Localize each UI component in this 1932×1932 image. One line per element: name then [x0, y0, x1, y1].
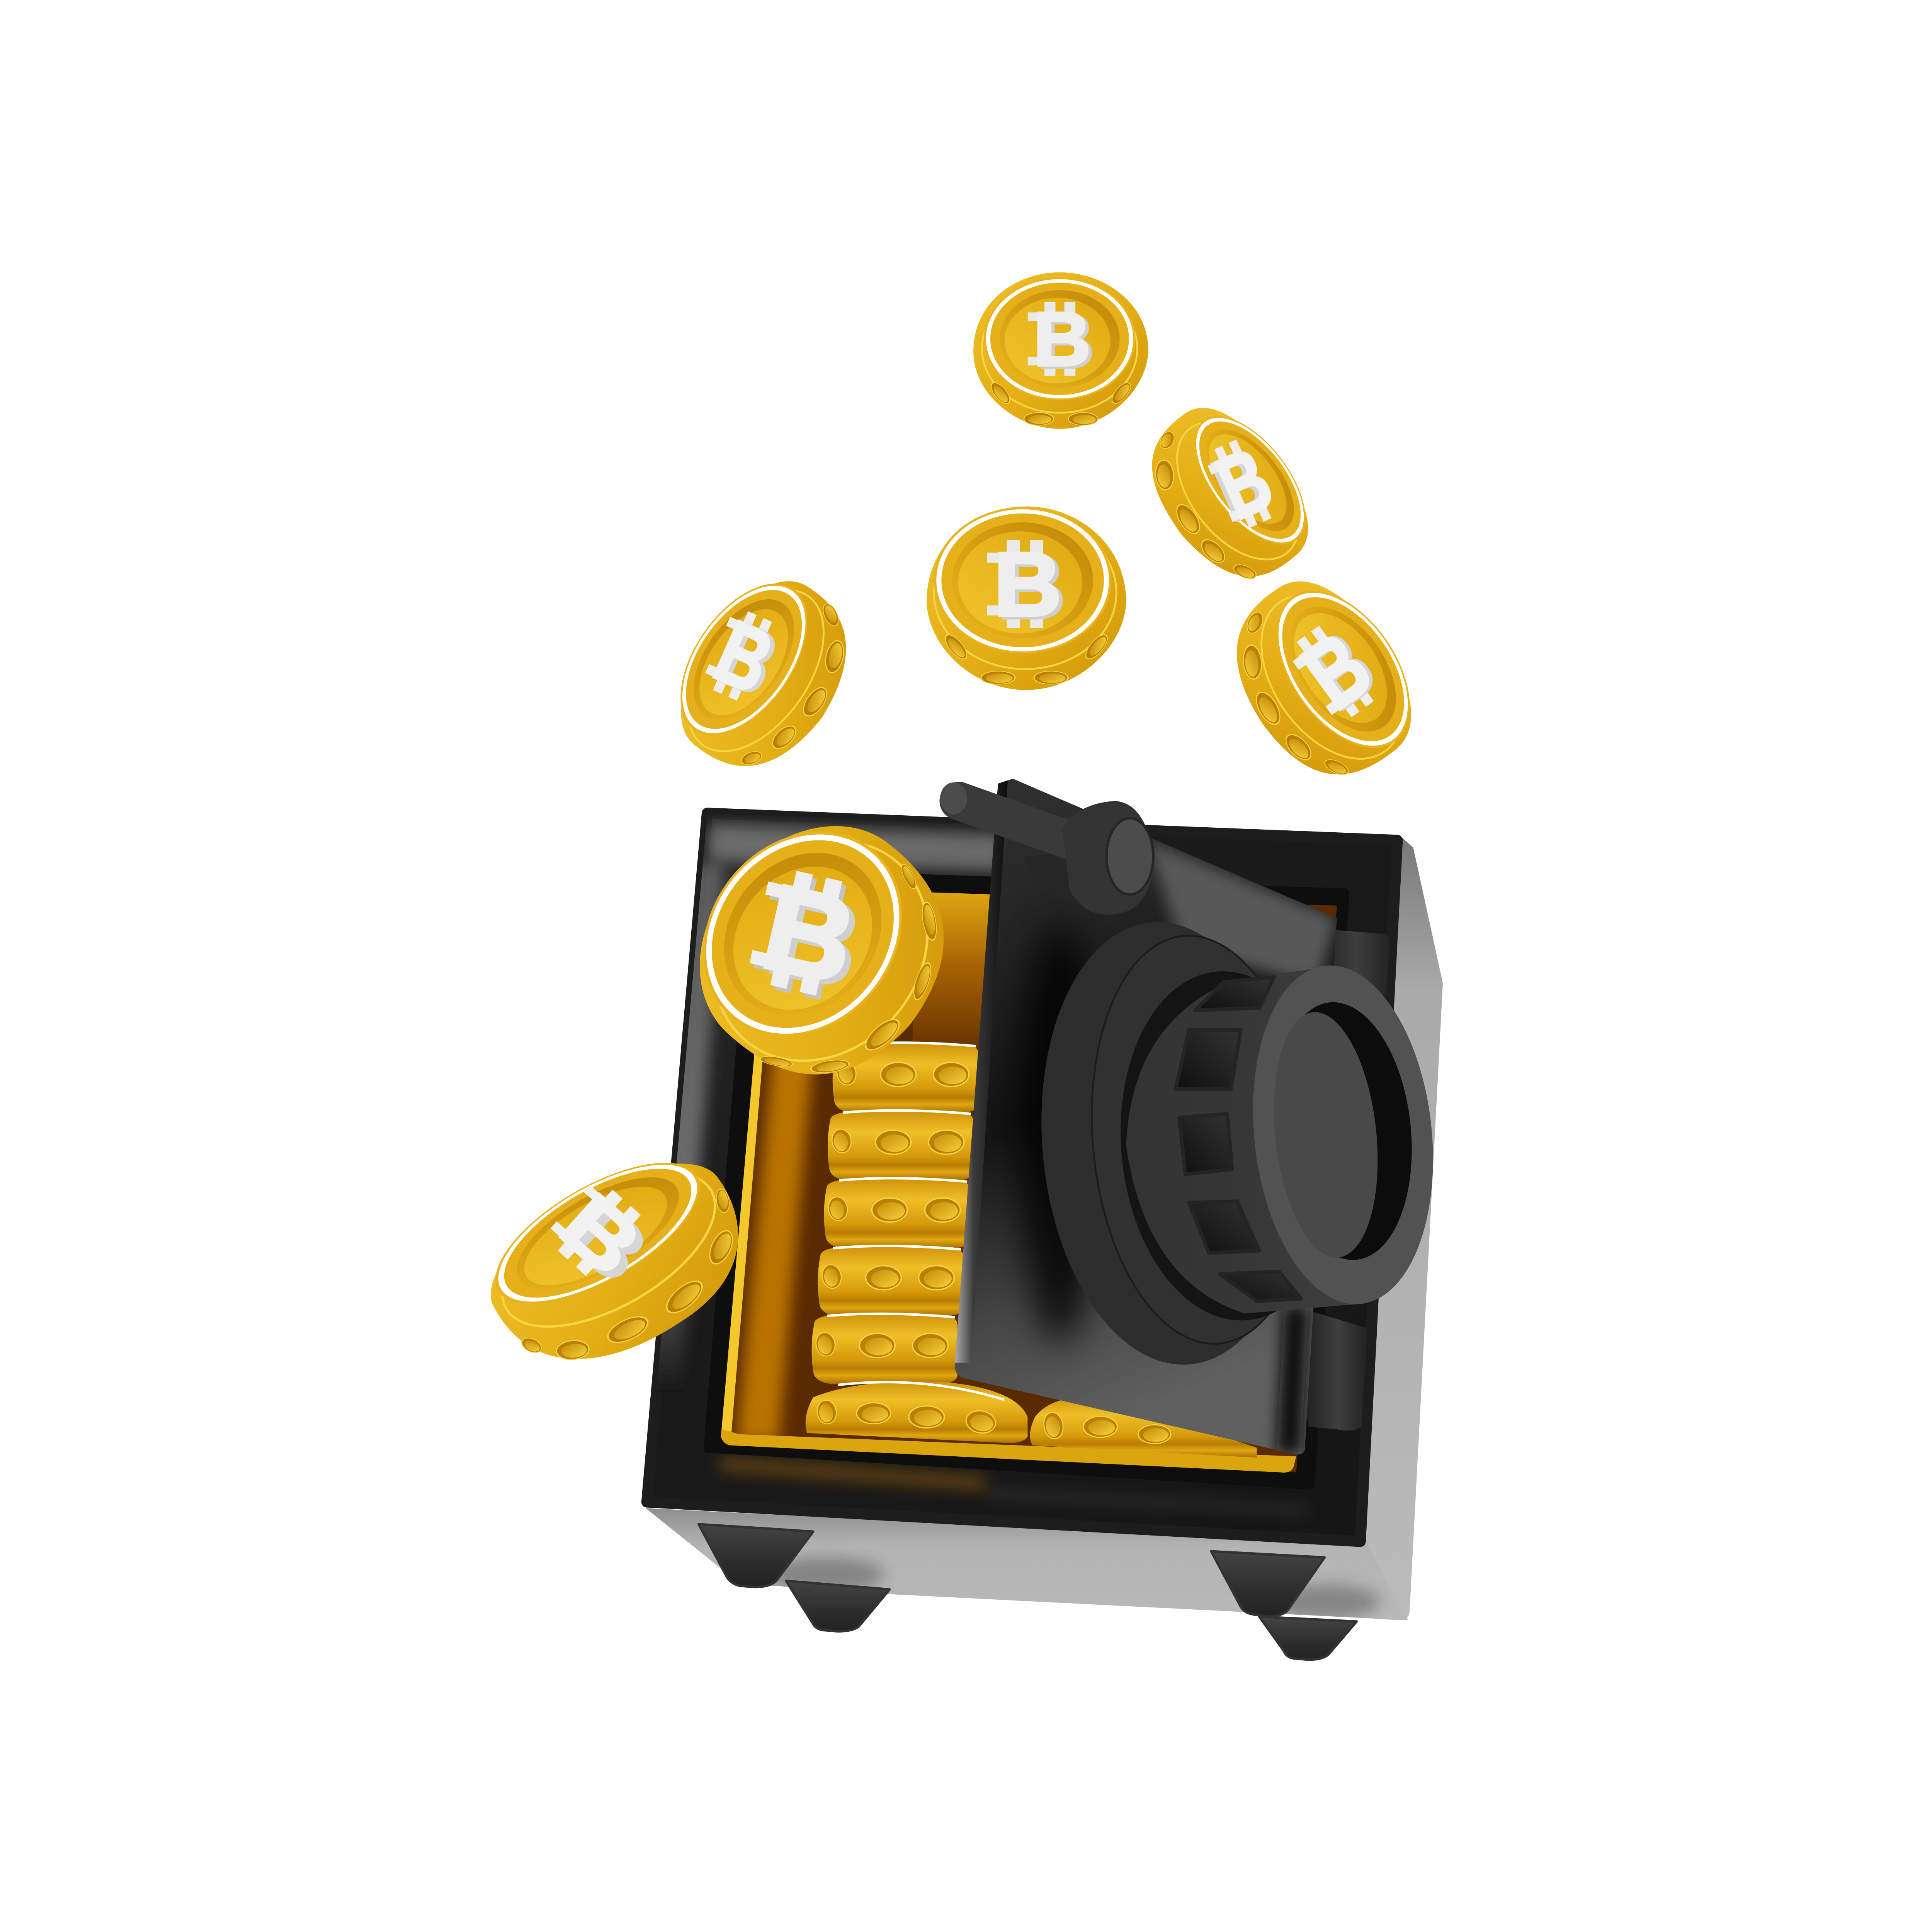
coin body: [927, 507, 1126, 690]
knob front ring: [1237, 956, 1449, 1313]
foot: front left: [699, 1524, 813, 1587]
stack of coins inside safe: [806, 1043, 1257, 1458]
coin rim holes: [745, 860, 987, 1119]
handle lever: [940, 782, 1153, 915]
safe right side panel: [1355, 835, 1443, 1620]
knob barrel: [1126, 967, 1364, 1313]
stacked coin 5: [811, 1314, 957, 1384]
foot: rear left: [786, 1581, 889, 1631]
knob centre cap: [1263, 1007, 1389, 1263]
foot contact shadows: [766, 1558, 1380, 1619]
door panel: [955, 779, 1337, 1454]
coin body: [973, 272, 1148, 429]
stacked coin 1: [833, 1043, 978, 1112]
coin face: [1249, 566, 1437, 772]
frame gloss highlights: [653, 843, 1306, 1510]
safe door: [940, 779, 1449, 1454]
neighbouring floor coin: [1030, 1396, 1257, 1458]
handle boss shadow: [1025, 850, 1115, 906]
foot: front right: [1211, 1551, 1325, 1617]
dial base disc: [1024, 911, 1318, 1376]
coin: upper right: [1124, 384, 1334, 603]
coin rim holes: [942, 631, 1111, 684]
coin rim ridge: [1153, 400, 1323, 582]
hinge: lower: [1294, 1306, 1368, 1431]
knob ridges: [1175, 977, 1301, 1301]
coin: lower right: [1204, 554, 1441, 804]
coin rim ridge: [478, 1141, 740, 1358]
bitcoin symbol: top coin: B: [1033, 296, 1091, 381]
ridge 5: [1220, 1272, 1301, 1301]
coin rim holes: [501, 1184, 770, 1393]
bitcoin symbol: centre coin: B: [994, 534, 1061, 635]
coin rim holes: [1128, 426, 1277, 595]
bitcoin symbol: upper right coin: B: [1204, 429, 1285, 537]
bitcoin symbol: lower right coin: B: [1288, 612, 1393, 728]
illustration: open safe with bitcoin coins: [491, 272, 1443, 1661]
coin rim holes: [988, 380, 1134, 425]
coin face: [662, 791, 943, 1077]
bitcoin symbol: upper right coin: B: [1200, 430, 1281, 539]
coin rim holes: [1209, 606, 1368, 797]
coin rim holes: [720, 598, 874, 784]
ridge 3: [1179, 1114, 1232, 1174]
bitcoin symbol: large coin: B: [758, 864, 873, 1015]
door left glossy edge: [955, 779, 1008, 1363]
knob recess: [1262, 995, 1424, 1267]
coin: large foreground: [651, 780, 990, 1121]
stacked coin 6 wide: [806, 1381, 1027, 1443]
dial groove shadow: [1106, 962, 1358, 1330]
coin body: [1124, 387, 1330, 603]
bitcoin symbol: large coin: B: [752, 859, 867, 1010]
stacked coin 3: [824, 1178, 970, 1248]
safe opening recess: [707, 872, 1345, 1486]
bitcoin symbol: top coin: B: [1037, 298, 1094, 384]
coin: centre: [927, 507, 1126, 690]
interior wall shading: [719, 882, 992, 1442]
bitcoin symbol: lower left coin: B: [543, 1176, 659, 1293]
coin rim ridge: [1232, 569, 1432, 785]
bitcoin symbol: centre coin: B: [998, 536, 1065, 637]
bitcoin symbol: lower left coin: B: [550, 1183, 666, 1300]
coin face: [984, 277, 1135, 400]
coin rim ridge: [934, 516, 1116, 669]
coin rim ridge: [670, 798, 971, 1104]
ridge 1: [1195, 977, 1274, 1010]
foot: rear right: [1259, 1617, 1357, 1660]
coin face: [1173, 397, 1327, 563]
coin rim ridge: [982, 285, 1137, 413]
bitcoin symbol: lower right coin: B: [1285, 612, 1389, 729]
interior bottom gold lip: [721, 1429, 1296, 1473]
door shading: [955, 779, 1337, 1454]
safe front frame: [647, 813, 1397, 1541]
coin face: [655, 561, 833, 758]
ridge 4: [1189, 1201, 1259, 1253]
hinge: upper: [1306, 922, 1390, 996]
dial inner plate: [1075, 927, 1327, 1353]
coin rim ridge: [660, 566, 851, 776]
safe body: [646, 813, 1443, 1660]
coin body: [654, 557, 879, 796]
coin: top: [973, 272, 1148, 429]
ridge 2: [1175, 1030, 1241, 1089]
stacked coin 4: [818, 1246, 964, 1316]
coin: lower left: [464, 1125, 774, 1400]
coin face: [934, 507, 1112, 653]
bitcoin symbol: left coin: B: [706, 604, 791, 714]
stacked coin 2: [828, 1111, 973, 1180]
gold interior: [721, 887, 1337, 1473]
coin body: [655, 782, 990, 1120]
coin body: [467, 1131, 772, 1400]
bitcoin symbol: left coin: B: [702, 602, 786, 712]
coin body: [1204, 557, 1438, 804]
coin: left: [648, 552, 880, 796]
safe bottom panel: [646, 1508, 1408, 1620]
coin face: [475, 1135, 721, 1332]
